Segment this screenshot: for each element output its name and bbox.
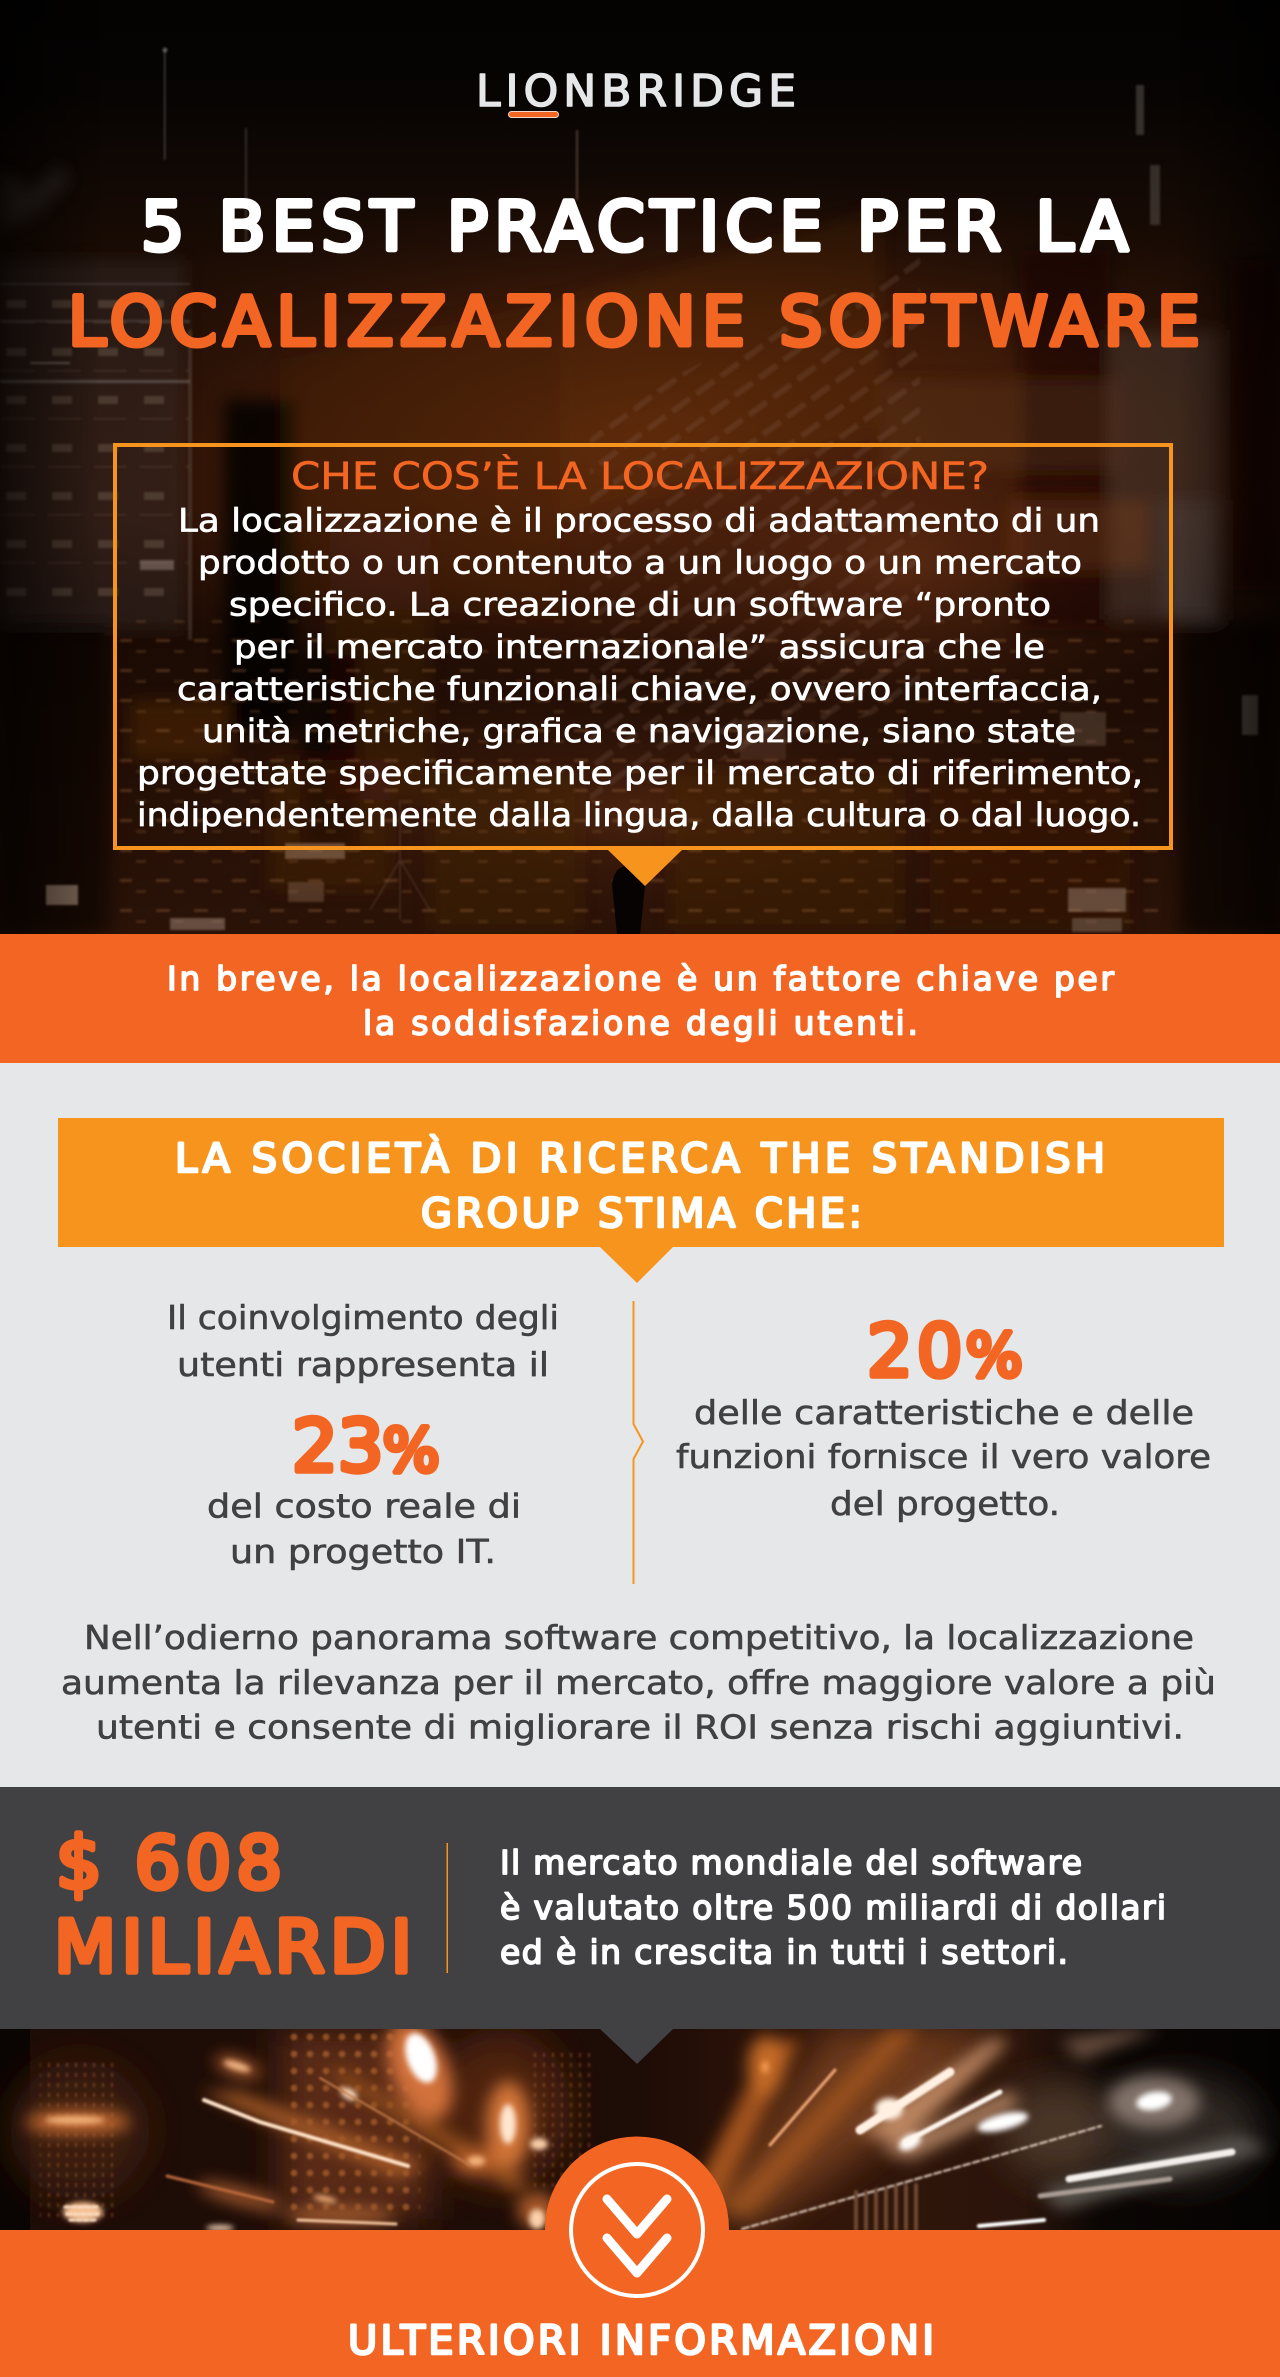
panel: in brief band bbox=[0, 934, 1280, 1063]
banner: Standish Group bbox=[58, 1118, 1224, 1283]
text block: definition: indipendentemente dalla lingua, dalla cultura o dal luogo. bbox=[137, 796, 1141, 834]
stat: 20 percent: del progetto. bbox=[830, 1484, 1060, 1523]
banner: Standish Group: LA SOCIETÀ DI RICERCA THE STANDISH bbox=[175, 1134, 1105, 1182]
stat: 608 billion: MILIARDI bbox=[54, 1905, 412, 1989]
stat: 20 percent: delle caratteristiche e delle bbox=[694, 1393, 1194, 1432]
text block: definition bbox=[137, 502, 1143, 834]
heading: what is localization: CHE COS’È LA LOCALIZZAZIONE? bbox=[291, 454, 989, 498]
text block: market relevance: aumenta la rilevanza per il mercato, offre maggiore valore a più bbox=[61, 1663, 1216, 1702]
stat: 20 percent: funzioni fornisce il vero valore bbox=[676, 1437, 1211, 1476]
text block: definition: per il mercato internazionale” assicura che le bbox=[234, 628, 1045, 666]
text block: market relevance: utenti e consente di migliorare il ROI senza rischi aggiuntivi. bbox=[96, 1708, 1184, 1746]
banner: Standish Group: GROUP STIMA CHE: bbox=[421, 1191, 862, 1237]
text block: global software market: Il mercato mondiale del software bbox=[500, 1843, 1082, 1882]
text block: definition: specifico. La creazione di un software “pronto bbox=[229, 586, 1051, 624]
panel: what is localization bbox=[115, 445, 1171, 848]
stat: 608 billion bbox=[54, 1821, 412, 1989]
stat: 23 percent: utenti rappresenta il bbox=[177, 1345, 549, 1384]
stat: 23 percent: del costo reale di bbox=[207, 1486, 521, 1526]
building details bbox=[0, 48, 1258, 932]
panel: footer call to action bbox=[0, 2136, 1280, 2377]
soft building masses bbox=[0, 165, 1280, 934]
text block: global software market: ed è in crescita in tutti i settori. bbox=[500, 1932, 1068, 1972]
text block: definition: unità metriche, grafica e navigazione, siano state bbox=[202, 712, 1076, 750]
stat: 608 billion: $ 608 bbox=[56, 1821, 282, 1905]
text block: global software market bbox=[500, 1843, 1166, 1972]
title bbox=[68, 188, 1200, 362]
panel: research section background bbox=[0, 1063, 1280, 1787]
arrow: dark pointer bbox=[600, 2029, 673, 2064]
stat: 20 percent: 20% bbox=[867, 1309, 1027, 1393]
panel: market size bbox=[0, 1787, 1280, 2064]
arrow: box pointer bbox=[608, 850, 682, 886]
icon: silhouette of a standing person bbox=[612, 866, 645, 934]
stat: 23 percent: Il coinvolgimento degli bbox=[167, 1298, 559, 1337]
title: 5 BEST PRACTICE PER LA bbox=[141, 188, 1128, 267]
logo underline bar bbox=[508, 112, 558, 118]
panel: hero cityscape background bbox=[0, 0, 1280, 960]
divider with chevron bbox=[634, 1301, 643, 1584]
title: LOCALIZZAZIONE SOFTWARE bbox=[68, 283, 1200, 362]
stat: 20 percent bbox=[676, 1309, 1211, 1523]
panel: photo strip bbox=[0, 2011, 1280, 2231]
text block: definition: prodotto o un contenuto a un luogo o un mercato bbox=[198, 544, 1082, 582]
text block: global software market: è valutato oltre 500 miliardi di dollari bbox=[500, 1888, 1166, 1927]
stat: 23 percent: 23% bbox=[292, 1404, 440, 1488]
text block: definition: La localizzazione è il processo di adattamento di un bbox=[178, 502, 1100, 540]
panel: footer call to action: ULTERIORI INFORMAZIONI bbox=[348, 2318, 934, 2364]
text block: market relevance: Nell’odierno panorama software competitivo, la localizzazione bbox=[84, 1618, 1194, 1657]
stat: 23 percent bbox=[167, 1298, 559, 1571]
panel: in brief band: la soddisfazione degli utenti. bbox=[363, 1004, 918, 1042]
logo: Lionbridge: LIONBRIDGE bbox=[476, 66, 796, 117]
text block: definition: progettate specificamente per il mercato di riferimento, bbox=[137, 754, 1143, 792]
stat: 23 percent: un progetto IT. bbox=[230, 1532, 496, 1571]
text block: market relevance bbox=[61, 1618, 1216, 1746]
panel: in brief band: In breve, la localizzazione è un fattore chiave per bbox=[167, 959, 1114, 998]
icon: double chevron in ring bbox=[571, 2164, 703, 2296]
text block: definition: caratteristiche funzionali chiave, ovvero interfaccia, bbox=[177, 670, 1102, 708]
